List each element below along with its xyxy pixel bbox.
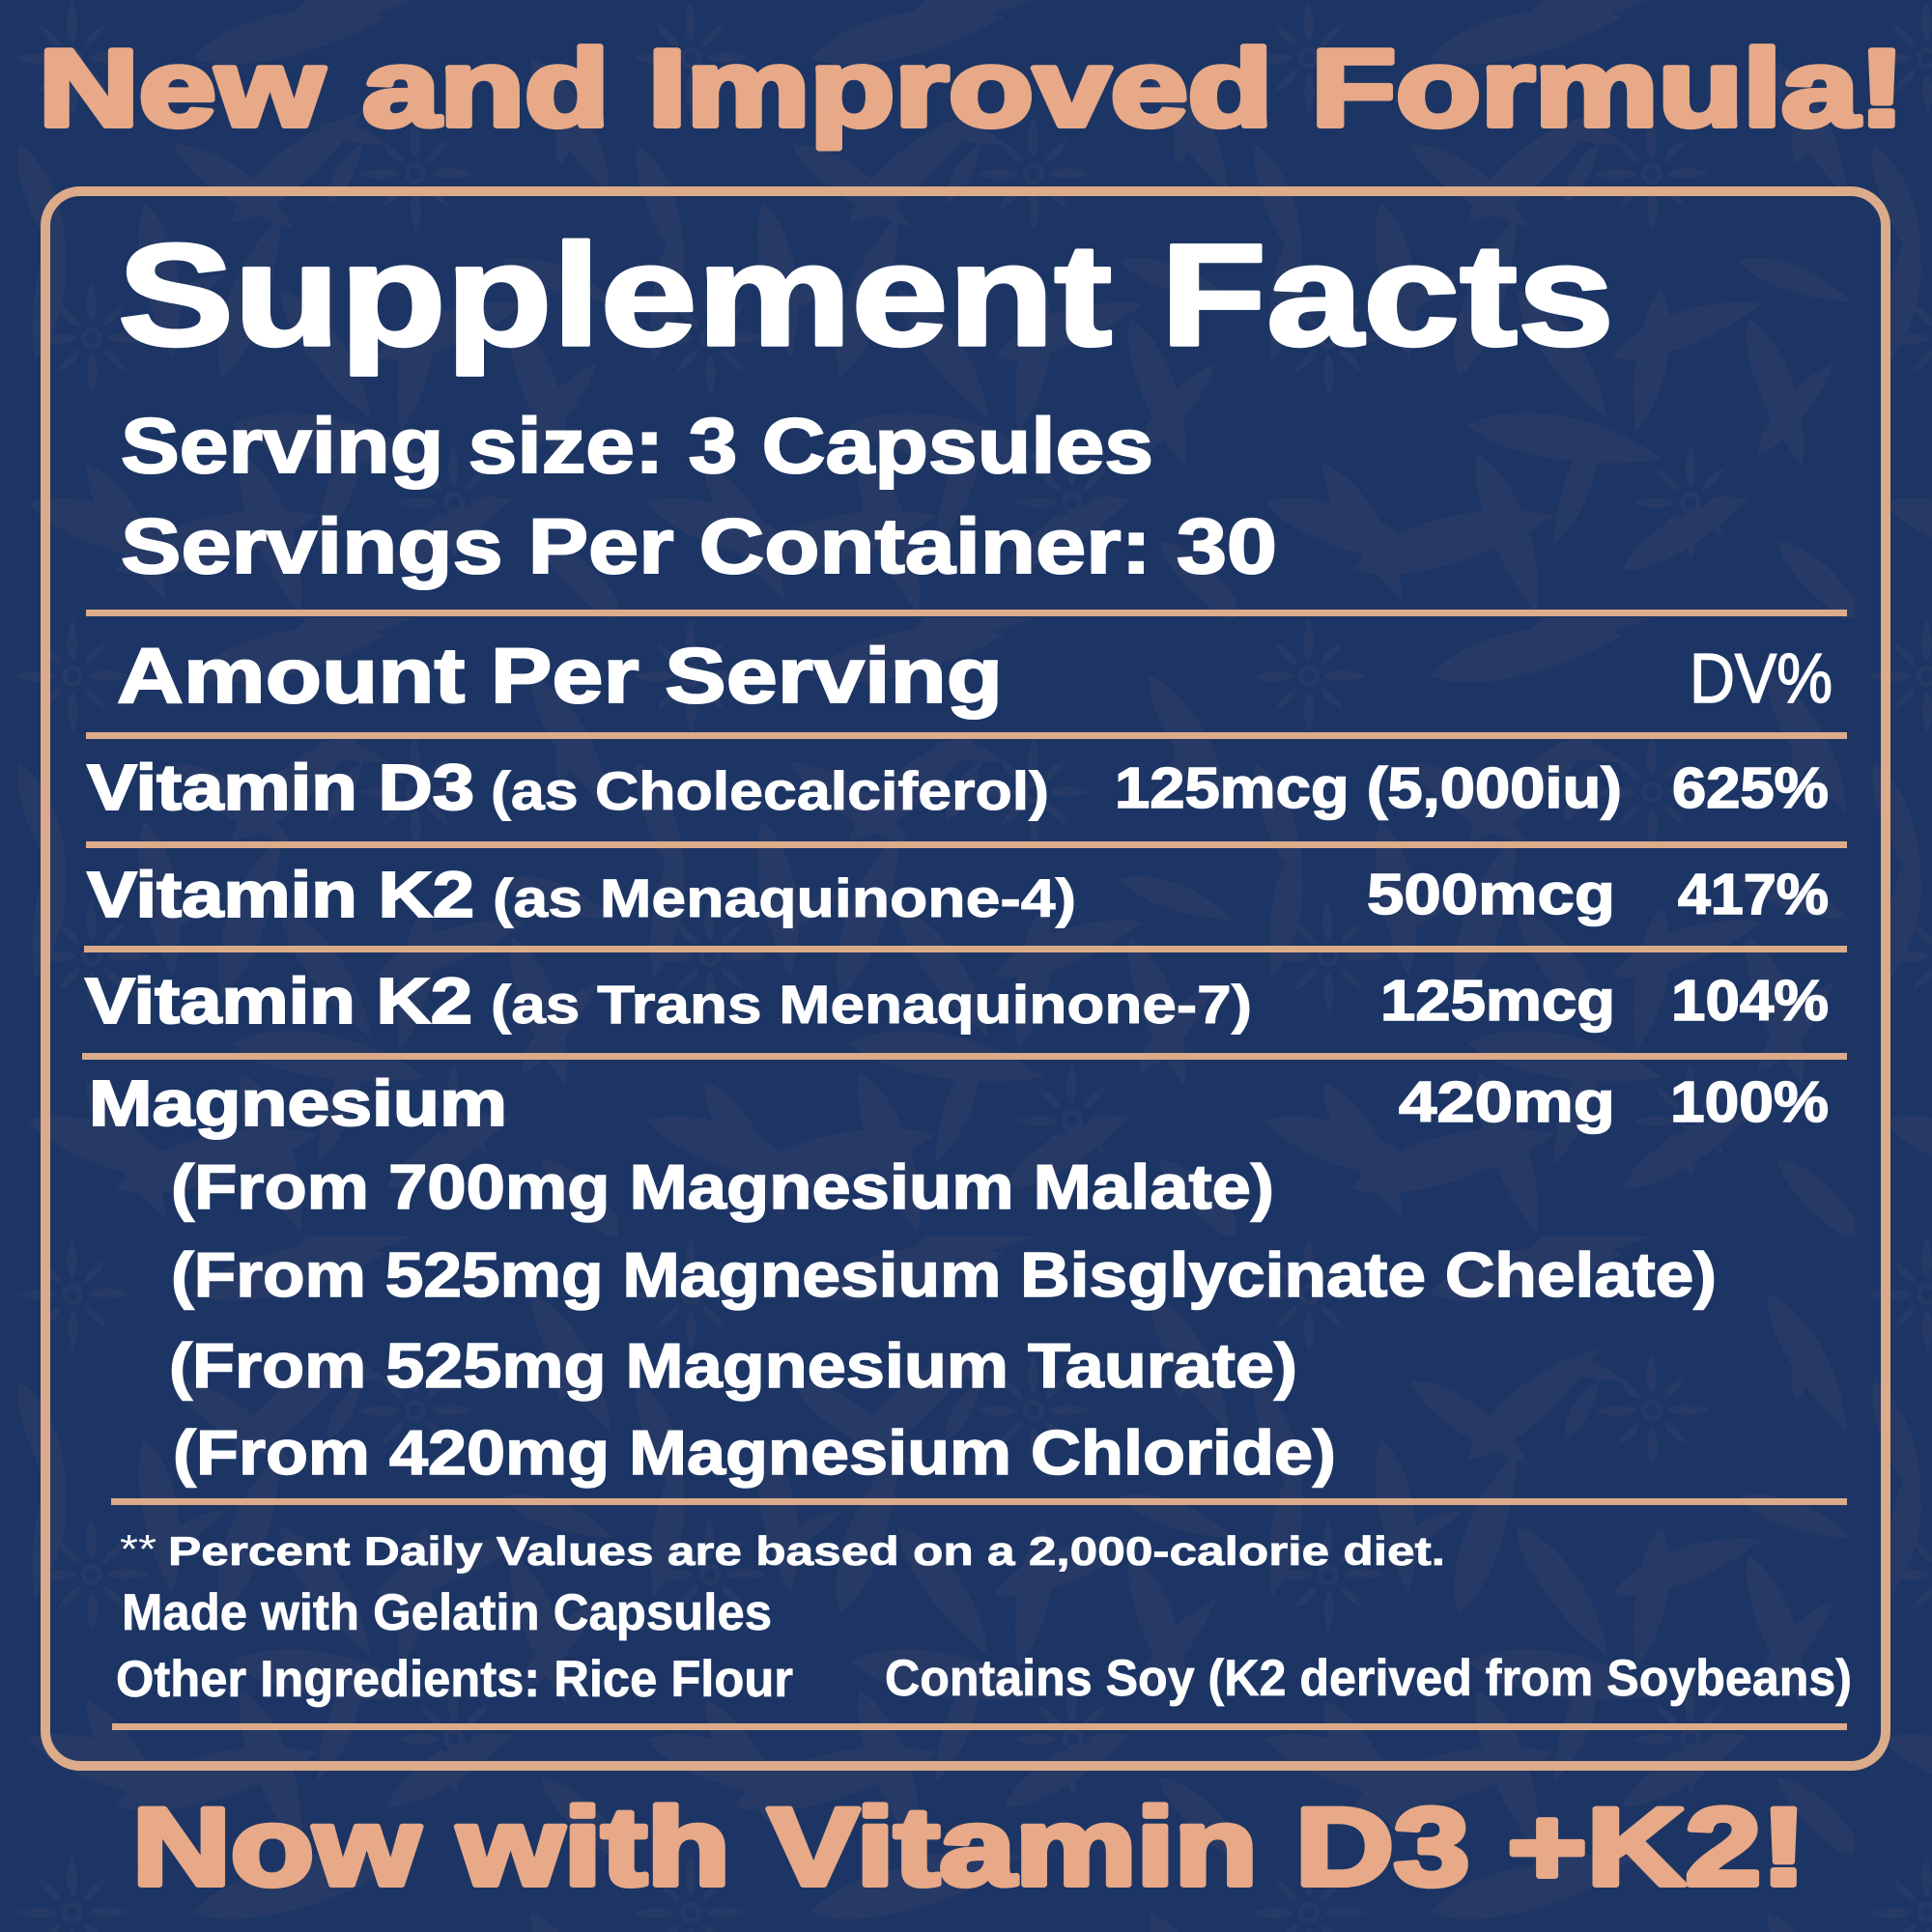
title: New and Improved Formula: New and Improved Formula! <box>39 27 1905 149</box>
row: Magnesium with sources: (From 525mg Magnesium Taurate) <box>169 1330 1297 1401</box>
row: Vitamin K2 Menaquinone-4: 500mcg <box>1367 863 1615 926</box>
row: Vitamin K2 Menaquinone-4: 417% <box>1678 863 1829 926</box>
text block: serving information <box>121 403 1277 590</box>
row: Magnesium with sources: (From 420mg Magnesium Chloride) <box>173 1417 1336 1488</box>
row: Magnesium with sources: (From 525mg Magnesium Bisglycinate Chelate) <box>171 1239 1717 1310</box>
callout: Now with Vitamin D3 + K2: Now with Vitamin D3 +K2! <box>132 1786 1806 1909</box>
row: Vitamin D3: Vitamin D3 <box>87 752 474 824</box>
row: Vitamin K2 Menaquinone-4 <box>87 859 1829 931</box>
row: Vitamin K2 Trans Menaquinone-7 <box>85 965 1829 1037</box>
row: Magnesium with sources: Magnesium <box>89 1067 507 1140</box>
footnotes: daily values and ingredients: Made with Gelatin Capsules <box>122 1584 772 1641</box>
row: Magnesium with sources: 420mg <box>1399 1070 1615 1134</box>
table header: Amount Per Serving and DV%: DV% <box>1690 640 1833 718</box>
footnotes: daily values and ingredients: Other Ingredients: Rice Flour <box>116 1651 793 1708</box>
row: Vitamin K2 Trans Menaquinone-7: 104% <box>1671 969 1829 1033</box>
text block: serving information: Serving size: 3 Capsules <box>121 403 1153 490</box>
row: Magnesium with sources <box>89 1067 1829 1488</box>
row: Vitamin K2 Trans Menaquinone-7: Vitamin K2 <box>85 965 472 1037</box>
row: Magnesium with sources: 100% <box>1670 1070 1829 1134</box>
footnotes: daily values and ingredients <box>116 1526 1852 1708</box>
row: Vitamin D3: (as Cholecalciferol) <box>491 760 1049 821</box>
table header: Amount Per Serving and DV%: Amount Per Serving <box>117 633 1003 720</box>
panel: supplement facts frame <box>45 191 1886 1766</box>
row: Vitamin D3 <box>87 752 1829 824</box>
row: Vitamin K2 Trans Menaquinone-7: (as Trans Menaquinone-7) <box>491 974 1252 1035</box>
table header: Amount Per Serving and DV% <box>117 633 1833 720</box>
row: Magnesium with sources: (From 700mg Magnesium Malate) <box>171 1151 1274 1222</box>
row: Vitamin K2 Menaquinone-4: Vitamin K2 <box>87 859 474 931</box>
row: Vitamin D3: 625% <box>1672 756 1829 820</box>
text block: serving information: Servings Per Container: 30 <box>121 503 1277 590</box>
footnotes: daily values and ingredients: ** <box>120 1526 156 1572</box>
row: Vitamin K2 Menaquinone-4: (as Menaquinone-4) <box>493 867 1076 928</box>
heading: Supplement Facts: Supplement Facts <box>118 213 1614 376</box>
row: Vitamin K2 Trans Menaquinone-7: 125mcg <box>1380 969 1615 1033</box>
footnotes: daily values and ingredients: Contains Soy (K2 derived from Soybeans) <box>885 1650 1852 1707</box>
row: Vitamin D3: 125mcg (5,000iu) <box>1115 756 1622 820</box>
footnotes: daily values and ingredients: Percent Daily Values are based on a 2,000-calorie diet. <box>168 1528 1445 1574</box>
